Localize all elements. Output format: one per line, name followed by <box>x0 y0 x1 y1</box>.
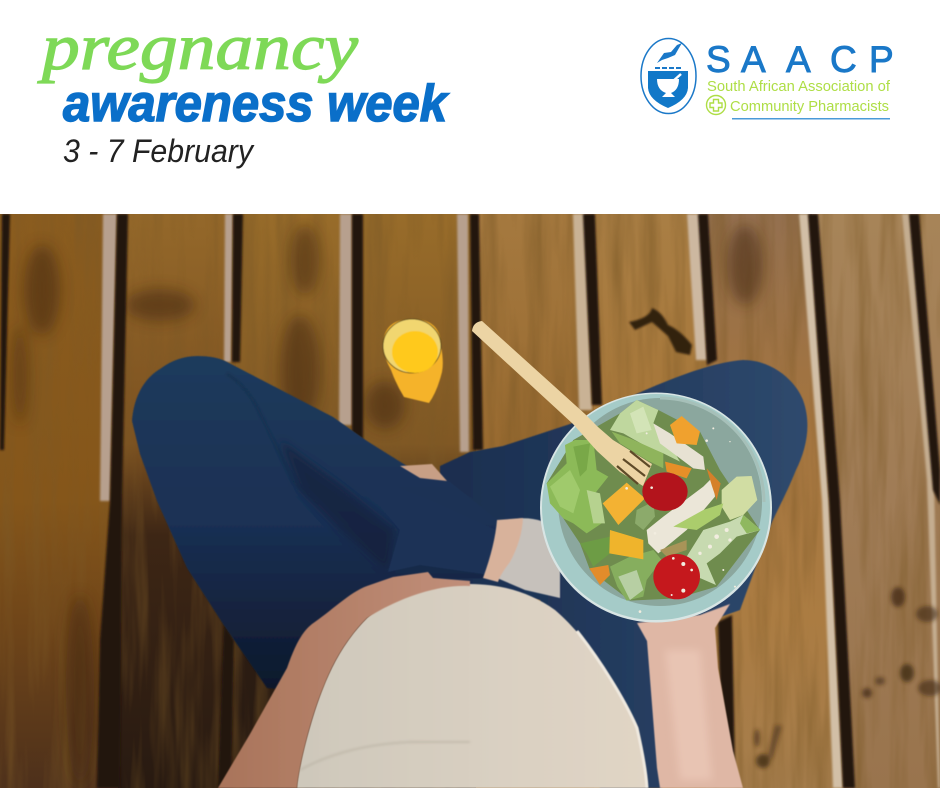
heading: awareness week: awareness week <box>63 75 450 133</box>
wooden floor <box>0 214 940 788</box>
knots and dark marks <box>629 308 692 355</box>
chicken <box>653 423 705 470</box>
logo line: South African Association of: South African Association of <box>707 78 891 95</box>
wood stains <box>13 225 763 785</box>
left arm and hand on belly <box>218 572 470 788</box>
wooden fork <box>472 321 652 486</box>
bowl of salad <box>540 392 772 622</box>
right hand and arm under bowl <box>637 604 743 788</box>
logo wordmark: SAACP <box>706 39 894 80</box>
croutons <box>670 416 700 445</box>
tomatoes <box>642 472 688 511</box>
leg: right knee and lower navy <box>440 360 807 788</box>
leg: left knee and thigh <box>132 356 497 690</box>
logo line: Community Pharmacists: Community Pharmacists <box>730 98 889 115</box>
left lettuce <box>547 440 608 533</box>
salad in bowl <box>547 400 761 613</box>
leg crease <box>228 374 294 482</box>
glass of orange juice <box>383 319 443 403</box>
salad base <box>547 400 760 601</box>
big croutons <box>603 483 645 525</box>
top lettuce <box>610 400 680 462</box>
dark gaps between planks <box>0 214 940 788</box>
right lettuce <box>722 476 757 520</box>
photo: pregnant woman with salad on wooden floor <box>0 214 940 788</box>
icon: crest <box>641 38 696 114</box>
bowl <box>540 392 772 622</box>
title block <box>37 11 450 169</box>
ankle and sock <box>400 464 560 598</box>
belly in beige top <box>297 584 647 788</box>
light strips between planks <box>100 214 940 788</box>
legs: navy leggings <box>132 356 807 788</box>
mixed greens centre <box>635 502 655 530</box>
logo: SAACP <box>641 38 894 120</box>
heading: pregnancy: pregnancy <box>37 11 359 84</box>
date: 3 - 7 February: 3 - 7 February <box>63 133 255 169</box>
parmesan crumbs <box>625 427 736 613</box>
icon: plus in circle <box>706 96 726 114</box>
